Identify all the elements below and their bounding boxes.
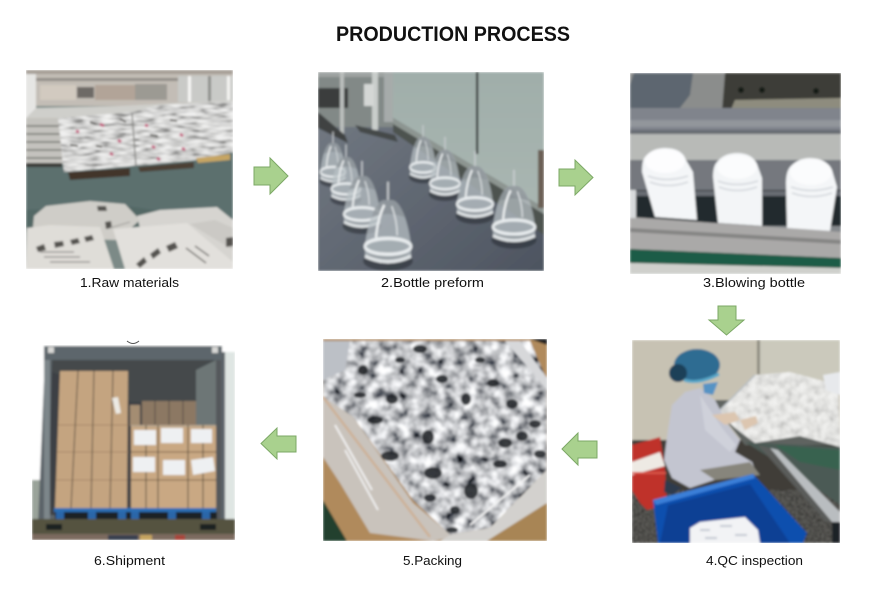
- arrow: raw materials to preform: [254, 158, 288, 194]
- red bin: [632, 437, 667, 510]
- panel: bottle preform photo: [318, 72, 544, 271]
- panel: raw materials photo: [26, 70, 233, 269]
- arrow: QC to packing: [562, 433, 597, 465]
- main pallet stacks: [58, 102, 233, 174]
- front bags: [26, 201, 233, 269]
- panel: QC inspection photo: [632, 340, 840, 543]
- bag of white caps: [715, 370, 840, 450]
- caption: step 6: 6.Shipment: [94, 553, 165, 568]
- small arc above container: [127, 341, 139, 344]
- caption: step 3: 3.Blowing bottle: [703, 275, 805, 290]
- dark caps: [354, 345, 546, 533]
- table and rail: [745, 442, 840, 543]
- panel: packing photo: [323, 339, 547, 541]
- panel: blowing bottle photo: [630, 73, 841, 274]
- bottles: [630, 148, 837, 231]
- container frame: [38, 346, 225, 525]
- arrow: blowing to QC: [709, 306, 744, 335]
- left box stack: [55, 371, 128, 508]
- caption: step 4: 4.QC inspection: [706, 553, 803, 568]
- blue bin with caps: [653, 474, 807, 543]
- arrow: preform to blowing: [559, 160, 593, 195]
- caption: step 1: 1.Raw materials: [80, 275, 180, 290]
- worker: [664, 349, 760, 495]
- blue pallets: [54, 508, 217, 519]
- caption: step 2: 2.Bottle preform: [381, 275, 484, 290]
- machinery: [318, 72, 398, 143]
- preforms: [320, 125, 537, 271]
- wrap film edges: [323, 341, 547, 541]
- panel: shipment container photo: [32, 345, 235, 540]
- caption: step 5: 5.Packing: [403, 553, 462, 568]
- left back stack: [26, 118, 62, 167]
- container sill: [32, 519, 235, 540]
- right box stack with labels: [131, 425, 216, 509]
- title: PRODUCTION PROCESS: [336, 22, 570, 46]
- back boxes: [130, 401, 196, 426]
- arrow: packing to shipment: [261, 428, 296, 459]
